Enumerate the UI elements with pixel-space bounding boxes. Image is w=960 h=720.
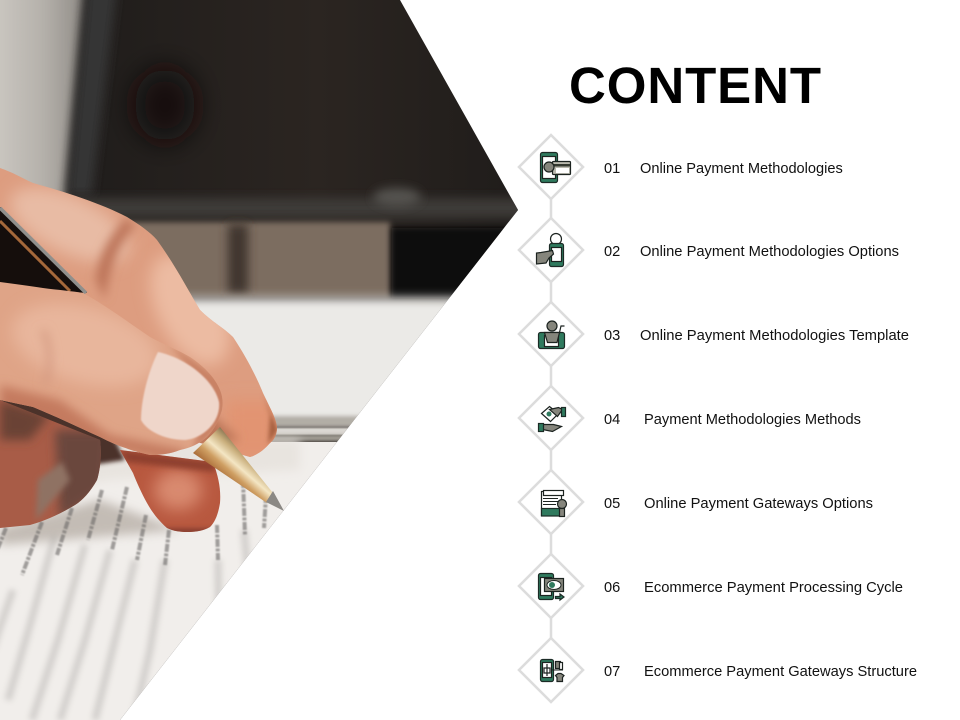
index finger [0, 160, 285, 460]
middle finger [120, 450, 220, 532]
diamond 07 [519, 638, 583, 702]
item 04 [519, 386, 861, 450]
item 07 [519, 638, 917, 702]
icon: phone with banknote [538, 574, 564, 600]
pen tip [193, 427, 284, 511]
icon: certificate document [542, 490, 566, 516]
item 03 [519, 302, 909, 366]
thumb [0, 282, 222, 455]
diamond 03 [519, 302, 583, 366]
icon: shopping cart on phone [538, 321, 564, 348]
number 02: 02 [604, 244, 620, 260]
blurred background: shelf and boxes [70, 188, 530, 298]
icon: phone with shopping items [540, 660, 564, 682]
number 04: 04 [604, 412, 620, 428]
number 01: 01 [604, 161, 620, 177]
label 03: Online Payment Methodologies Template [640, 328, 909, 344]
number 03: 03 [604, 328, 620, 344]
number 05: 05 [604, 496, 620, 512]
blurred background: papers [189, 290, 456, 442]
dark gap behind the thumb [0, 400, 126, 468]
icon: hand holding phone [536, 234, 564, 266]
thumbnail [141, 352, 219, 440]
sharp upper text columns [0, 480, 266, 575]
diamond 05 [519, 470, 583, 534]
item 01 [519, 135, 843, 199]
label 04: Payment Methodologies Methods [644, 412, 861, 428]
blurred lower text columns [0, 530, 248, 720]
blurred background: wall and monitor [0, 0, 204, 196]
icon: hands exchanging money [538, 406, 566, 432]
label 06: Ecommerce Payment Processing Cycle [644, 580, 903, 596]
diamond 02 [519, 218, 583, 282]
paper with printed text [0, 434, 337, 720]
label 07: Ecommerce Payment Gateways Structure [644, 664, 917, 680]
item 05 [519, 470, 873, 534]
item 06 [519, 554, 903, 618]
diamond 04 [519, 386, 583, 450]
label 01: Online Payment Methodologies [640, 161, 843, 177]
number 07: 07 [604, 664, 620, 680]
ring finger [0, 400, 101, 528]
label 02: Online Payment Methodologies Options [640, 244, 899, 260]
photo: hand writing with a pen [0, 0, 530, 720]
item 02 [519, 218, 899, 282]
diamond 06 [519, 554, 583, 618]
label 05: Online Payment Gateways Options [644, 496, 873, 512]
icon: phone with card [540, 152, 570, 182]
connector lines between diamonds [550, 199, 552, 638]
number 06: 06 [604, 580, 620, 596]
title: CONTENT [569, 57, 821, 114]
pen barrel [0, 207, 87, 293]
diamond 01 [519, 135, 583, 199]
